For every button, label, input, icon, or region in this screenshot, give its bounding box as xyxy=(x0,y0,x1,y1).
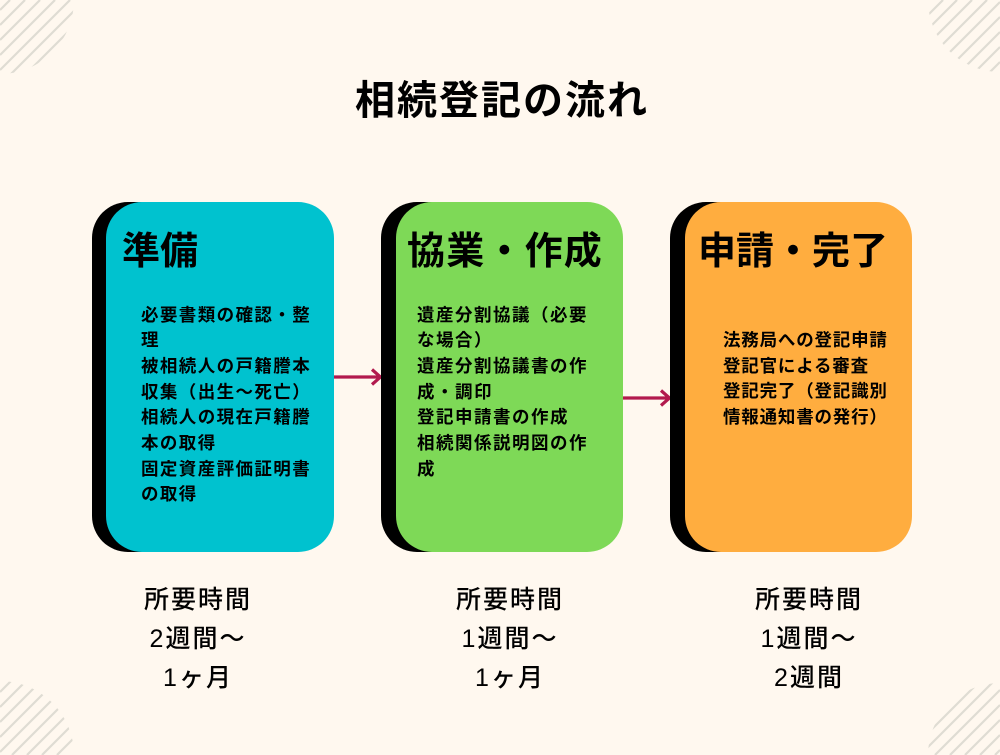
text block: 申請・完了 tasks xyxy=(723,330,888,427)
duration: 協業・作成: 1ヶ月 xyxy=(475,664,545,692)
text block: 準備 tasks: 相続人の現在戸籍謄 xyxy=(141,407,311,427)
arrow: 協業・作成 to 申請・完了 xyxy=(623,389,670,407)
duration: 準備: 1ヶ月 xyxy=(163,664,233,692)
text block: 協業・作成 tasks: 遺産分割協議（必要 xyxy=(417,304,588,324)
text block: 協業・作成 tasks: 登記申請書の作成 xyxy=(417,407,569,427)
text block: 準備 tasks: 被相続人の戸籍謄本 xyxy=(141,356,311,376)
text block: 協業・作成 tasks: 成 xyxy=(417,459,436,479)
text block: 協業・作成 tasks: 成・調印 xyxy=(417,382,493,402)
text block: 準備 tasks: の取得 xyxy=(141,484,198,504)
heading: 申請・完了: 申請・完了 xyxy=(698,231,888,273)
panel face xyxy=(106,202,334,552)
text block: 準備 tasks: 固定資産評価証明書 xyxy=(141,459,311,479)
arrow: 準備 to 協業・作成 xyxy=(334,368,381,386)
panel: 準備 xyxy=(92,202,334,552)
panel shadow xyxy=(670,202,870,552)
text block: 申請・完了 tasks: 登記官による審査 xyxy=(723,356,869,376)
duration: 申請・完了: 1週間～ xyxy=(761,625,857,653)
duration: 協業・作成 xyxy=(456,586,564,692)
title: 相続登記の流れ xyxy=(355,79,649,123)
text block: 申請・完了 tasks: 登記完了（登記識別 xyxy=(723,381,888,401)
text block: 準備 tasks xyxy=(141,304,311,504)
text block: 申請・完了 tasks: 法務局への登記申請 xyxy=(723,330,888,350)
duration: 協業・作成: 所要時間 xyxy=(456,586,564,614)
heading: 協業・作成: 協業・作成 xyxy=(407,231,603,273)
duration: 申請・完了: 所要時間 xyxy=(755,586,863,614)
duration: 協業・作成: 1週間～ xyxy=(462,625,558,653)
text block: 協業・作成 tasks: な場合） xyxy=(417,330,493,350)
text block: 申請・完了 tasks: 情報通知書の発行） xyxy=(723,407,888,427)
panel shadow xyxy=(92,202,292,552)
text block: 協業・作成 tasks: 相続関係説明図の作 xyxy=(417,433,588,453)
duration: 準備 xyxy=(144,586,252,692)
panel shadow xyxy=(381,202,581,552)
text block: 準備 tasks: 収集（出生～死亡） xyxy=(141,382,311,402)
duration: 申請・完了 xyxy=(755,586,863,692)
text block: 協業・作成 tasks: 遺産分割協議書の作 xyxy=(417,356,588,376)
panel face xyxy=(396,202,623,552)
heading: 準備: 準備 xyxy=(122,231,198,273)
text block: 協業・作成 tasks xyxy=(417,304,588,479)
duration: 準備: 2週間～ xyxy=(150,625,246,653)
panel: 申請・完了 xyxy=(670,202,912,552)
panel face xyxy=(685,202,912,552)
text block: 準備 tasks: 理 xyxy=(141,330,160,350)
panel: 協業・作成 xyxy=(381,202,623,552)
duration: 準備: 所要時間 xyxy=(144,586,252,614)
text block: 準備 tasks: 必要書類の確認・整 xyxy=(141,304,311,324)
duration: 申請・完了: 2週間 xyxy=(774,664,844,692)
text block: 準備 tasks: 本の取得 xyxy=(141,433,217,453)
